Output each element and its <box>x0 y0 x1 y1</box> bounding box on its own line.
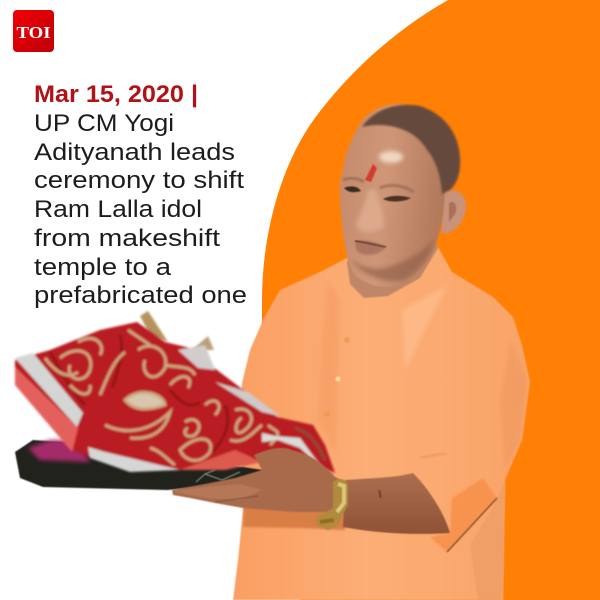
ear <box>442 190 466 233</box>
hand holding tray <box>172 448 345 512</box>
text block: caption <box>34 81 247 309</box>
flowers <box>28 440 90 462</box>
arm shadow on kurta <box>243 505 345 530</box>
logo: TOI <box>13 10 54 52</box>
offering tray with cloth <box>15 311 335 490</box>
forehead highlight <box>379 151 403 163</box>
red cloth <box>15 322 335 473</box>
kurta folds <box>318 280 340 455</box>
mouth <box>355 240 386 255</box>
cloth swirl pattern <box>45 330 325 465</box>
right eye <box>383 196 411 202</box>
silver trim near hand <box>262 433 322 468</box>
description: ceremony to shift <box>34 167 244 194</box>
kurta torso <box>233 247 530 600</box>
neck <box>347 220 438 298</box>
hair <box>362 105 460 194</box>
salmon cloth fold <box>15 367 78 452</box>
chin stubble shadow <box>350 240 434 281</box>
description: prefabricated one <box>34 282 247 309</box>
nose <box>356 190 384 232</box>
gold finials <box>140 311 168 342</box>
kurta back panel <box>470 480 505 600</box>
brows <box>343 178 414 192</box>
description: UP CM Yogi <box>34 110 174 137</box>
gold bracelet <box>316 479 348 530</box>
silver trim bottom <box>88 447 180 472</box>
tilak <box>365 164 377 182</box>
silver trim top right <box>178 345 215 370</box>
palm and fingers <box>172 448 345 512</box>
logo: TOI: TOI <box>16 23 51 42</box>
sleeve cuff <box>430 478 497 552</box>
description <box>34 110 247 309</box>
dark shadows <box>50 335 228 452</box>
left eye <box>344 186 361 192</box>
silver trim left <box>15 353 83 427</box>
kurta buttons <box>344 337 350 343</box>
description: temple to a <box>34 254 172 281</box>
description: Ram Lalla idol <box>34 196 202 223</box>
tray <box>15 440 263 490</box>
forearm <box>343 473 450 534</box>
date heading: Mar 15, 2020 | <box>34 81 198 108</box>
description: from makeshift <box>34 225 220 252</box>
description: Adityanath leads <box>34 139 235 166</box>
illustration: man in saffron kurta <box>233 104 530 600</box>
orange arc background <box>262 0 600 600</box>
face <box>340 104 445 287</box>
head and neck <box>340 104 466 298</box>
